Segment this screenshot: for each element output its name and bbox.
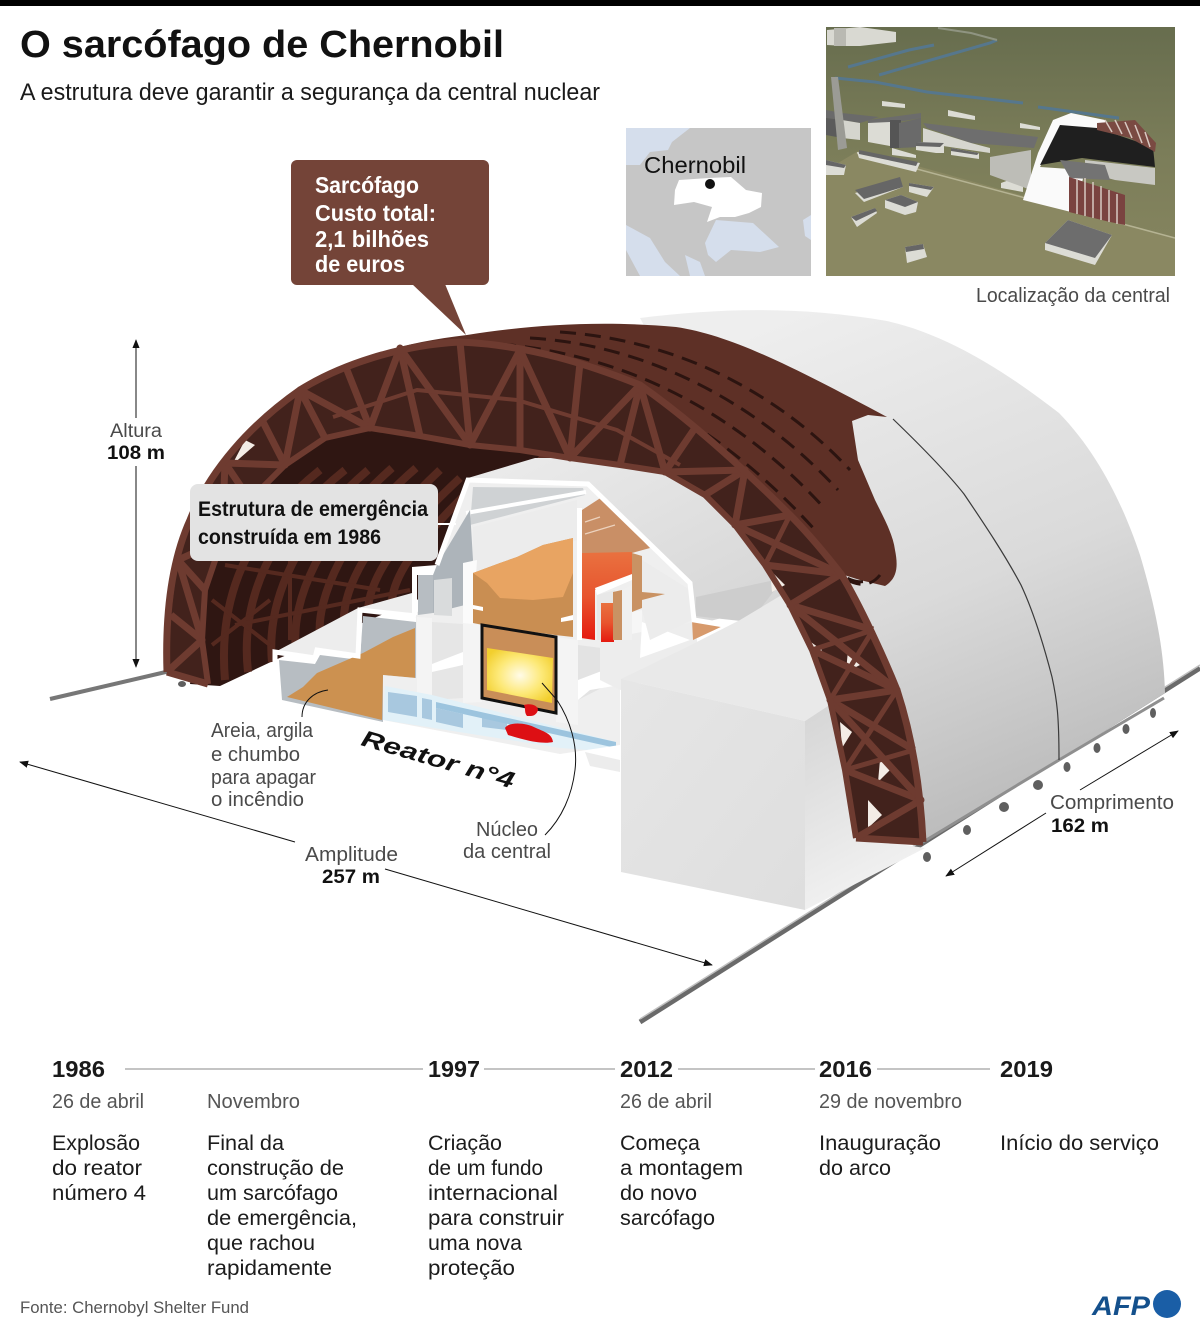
arch illustration bbox=[167, 310, 1165, 910]
photo caption: Localização da central bbox=[976, 285, 1170, 307]
chimney bbox=[831, 77, 847, 150]
reactor core bbox=[482, 625, 556, 743]
left halls bbox=[826, 110, 879, 123]
front steel truss bbox=[167, 342, 923, 842]
timeline 2012: sarcófago bbox=[620, 1207, 715, 1230]
sand label: para apagar bbox=[211, 767, 316, 789]
sand label: Areia, argila bbox=[211, 720, 314, 742]
mini arch bbox=[1023, 113, 1105, 213]
corium bbox=[524, 704, 538, 716]
sand pile bbox=[287, 628, 415, 720]
timeline 1986 april: 26 de abril bbox=[52, 1091, 144, 1113]
callout: total cost: 2,1 bilhões bbox=[315, 226, 429, 252]
timeline 2019 bbox=[1000, 1056, 1159, 1155]
timeline 2016: do arco bbox=[819, 1157, 891, 1180]
reactor hall roof outline bbox=[437, 480, 742, 628]
timeline 2016: 2016 bbox=[819, 1056, 872, 1082]
timeline 1997: uma nova bbox=[428, 1232, 522, 1255]
timeline 1986 november: de emergência, bbox=[207, 1207, 357, 1230]
top bar bbox=[0, 0, 1200, 6]
AFP logo bbox=[1091, 1290, 1181, 1321]
timeline 1997: para construir bbox=[428, 1207, 564, 1230]
length dimension: Comprimento bbox=[1050, 792, 1174, 814]
core label: da central bbox=[463, 841, 551, 863]
timeline 1997: proteção bbox=[428, 1257, 515, 1280]
timeline 2012: do novo bbox=[620, 1182, 697, 1205]
big block bbox=[1045, 220, 1112, 265]
right chamber bbox=[577, 497, 725, 642]
truss roof bbox=[167, 324, 897, 672]
callout: total cost: Sarcófago bbox=[315, 172, 419, 198]
timeline 2012 bbox=[620, 1056, 743, 1230]
timeline 1986 november: rapidamente bbox=[207, 1257, 332, 1280]
callout: emergency structure: construída em 1986 bbox=[198, 526, 381, 549]
source: Fonte: Chernobyl Shelter Fund bbox=[20, 1298, 249, 1317]
timeline 1986 april: Explosão bbox=[52, 1132, 140, 1155]
timeline 2016 bbox=[819, 1056, 962, 1180]
core label bbox=[463, 683, 576, 863]
map marker bbox=[705, 179, 715, 189]
timeline 1986 november: um sarcófago bbox=[207, 1182, 338, 1205]
timeline 1997 bbox=[428, 1056, 564, 1280]
sand label bbox=[211, 690, 328, 811]
reactor label: Reator n°4 bbox=[359, 725, 518, 793]
timeline 2019: 2019 bbox=[1000, 1056, 1053, 1082]
timeline 1997: internacional bbox=[428, 1182, 558, 1205]
timeline 1986 november: construção de bbox=[207, 1157, 344, 1180]
callout: total cost: Custo total: bbox=[315, 200, 436, 226]
stepped building left bbox=[275, 593, 416, 722]
long hall bbox=[923, 123, 1038, 148]
front concrete block bbox=[621, 590, 925, 910]
height dimension: 108 m bbox=[107, 443, 165, 464]
shell cladding bbox=[640, 310, 1165, 842]
timeline 1986 november: que rachou bbox=[207, 1232, 315, 1255]
title: O sarcófago de Chernobil bbox=[20, 24, 504, 66]
timeline 2012: Começa bbox=[620, 1132, 700, 1155]
timeline 1986 november: Final da bbox=[207, 1132, 284, 1155]
timeline 2016: Inauguração bbox=[819, 1132, 941, 1155]
timeline 2012: 2012 bbox=[620, 1056, 673, 1082]
span dimension bbox=[20, 762, 712, 965]
timeline 1986 november bbox=[207, 1091, 357, 1280]
subtitle: A estrutura deve garantir a segurança da central nuclear bbox=[20, 79, 600, 106]
timeline 2016: 29 de novembro bbox=[819, 1091, 962, 1113]
span dimension: 257 m bbox=[322, 867, 380, 888]
Ukraine bbox=[674, 177, 762, 222]
span dimension: Amplitude bbox=[305, 844, 398, 866]
timeline 1986 april bbox=[52, 1056, 146, 1205]
timeline 1986 april: do reator bbox=[52, 1157, 142, 1180]
aerial view of plant bbox=[826, 27, 1175, 276]
rails bbox=[50, 665, 1200, 1022]
sand label: e chumbo bbox=[211, 744, 300, 766]
lower rooms bbox=[417, 610, 700, 740]
timeline 1986 april: número 4 bbox=[52, 1182, 146, 1205]
height dimension: Altura bbox=[110, 421, 162, 442]
callout: total cost: de euros bbox=[315, 251, 405, 277]
length dimension bbox=[946, 731, 1178, 876]
callout: total cost bbox=[291, 160, 489, 335]
length dimension: 162 m bbox=[1051, 816, 1109, 837]
timeline 1997: de um fundo bbox=[428, 1157, 543, 1180]
callout: emergency structure: Estrutura de emergência bbox=[198, 498, 428, 521]
AFP logo: AFP bbox=[1091, 1291, 1151, 1321]
reactor hall back roof bbox=[383, 458, 790, 765]
timeline 2019: Início do serviço bbox=[1000, 1132, 1159, 1155]
callout: emergency structure bbox=[190, 484, 456, 561]
locator map bbox=[626, 128, 811, 276]
height dimension bbox=[104, 340, 170, 667]
timeline 1986 april: 1986 bbox=[52, 1056, 105, 1082]
timeline 2012: 26 de abril bbox=[620, 1091, 712, 1113]
water pools bbox=[383, 686, 620, 778]
timeline 1997: 1997 bbox=[428, 1056, 480, 1082]
timeline 1997: Criação bbox=[428, 1132, 502, 1155]
timeline bbox=[52, 1056, 1159, 1280]
core label: Núcleo bbox=[476, 819, 538, 841]
map label: Chernobil bbox=[644, 152, 746, 178]
timeline 2012: a montagem bbox=[620, 1157, 743, 1180]
sand label: o incêndio bbox=[211, 789, 304, 811]
debris bbox=[473, 538, 573, 637]
timeline 1986 november: Novembro bbox=[207, 1091, 300, 1113]
wheels bbox=[178, 681, 1156, 862]
interior ribs bbox=[190, 428, 540, 686]
